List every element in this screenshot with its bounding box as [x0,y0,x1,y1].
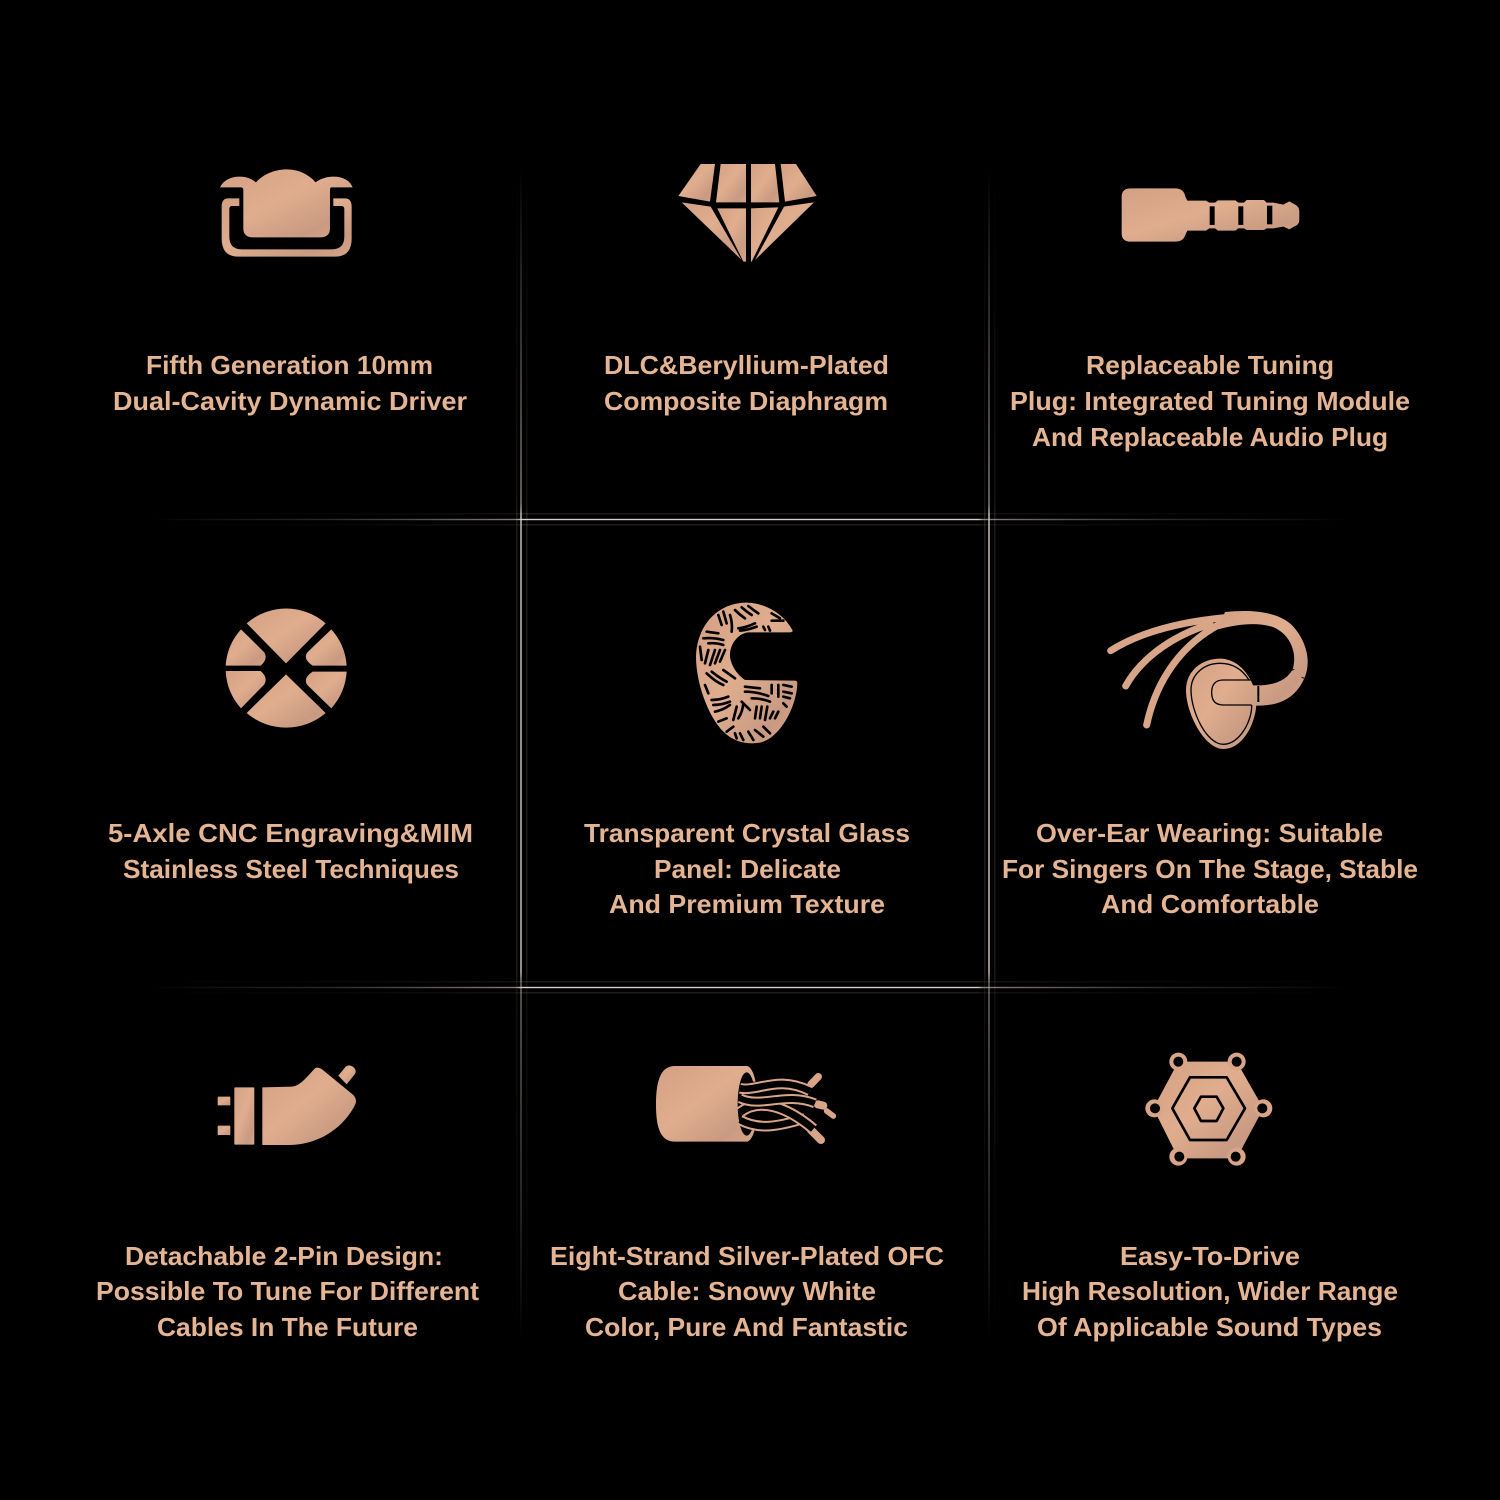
text: 2-pin caption: Cables In The Future [157,1312,418,1342]
panel: 2-pin design [96,1065,479,1342]
text: diaphragm caption: Composite Diaphragm [604,386,888,416]
panel: diaphragm [604,164,889,416]
icon: in-ear monitor with ear hook [1111,611,1308,749]
text: CNC caption [108,818,473,884]
grid dividers [150,170,1350,1340]
text: 2-pin caption: Possible To Tune For Different [96,1276,479,1306]
text: easy to drive caption: Of Applicable Sound Types [1037,1312,1382,1342]
text: cable caption: Cable: Snowy White [618,1276,876,1306]
icon: cross circle [226,608,347,728]
text: 2-pin caption [96,1241,479,1342]
text: driver caption: Dual-Cavity Dynamic Driver [113,386,467,416]
panel: easy to drive [1022,1053,1398,1342]
panel: CNC engraving [108,608,473,884]
text: over-ear caption: Over-Ear Wearing: Suitable [1036,818,1383,848]
text: tuning plug caption: Plug: Integrated Tuning Module [1010,386,1410,416]
text: diaphragm caption: DLC&Beryllium-Plated [604,350,889,380]
text: diaphragm caption [604,350,889,416]
icon: hexagon plate [1145,1053,1272,1166]
text: CNC caption: 5-Axle CNC Engraving&MIM [108,818,473,848]
text: driver caption [113,350,467,416]
text: cable caption: Color, Pure And Fantastic [585,1312,908,1342]
text: tuning plug caption: Replaceable Tuning [1086,350,1334,380]
text: CNC caption: Stainless Steel Techniques [123,854,459,884]
text: crystal glass caption: And Premium Texture [609,889,885,919]
text: easy to drive caption: High Resolution, Wider Range [1022,1276,1398,1306]
text: over-ear caption: For Singers On The Stage, Stable [1002,854,1418,884]
icon: patterned faceplate [696,603,797,743]
icon: driver [220,169,353,257]
text: crystal glass caption [584,818,910,919]
panel: crystal glass [584,603,910,919]
text: cable caption [550,1241,944,1342]
text: crystal glass caption: Transparent Crystal Glass [584,818,910,848]
text: over-ear caption: And Comfortable [1101,889,1319,919]
text: tuning plug caption: And Replaceable Audio Plug [1032,422,1388,452]
icon: audio plug [1122,188,1299,242]
text: tuning plug caption [1010,350,1410,452]
panel: over-ear wearing [1002,611,1418,919]
icon: 2-pin connector [218,1065,356,1145]
icon: diamond [678,164,817,262]
panel: tuning plug [1010,188,1410,452]
text: over-ear caption [1002,818,1418,919]
text: crystal glass caption: Panel: Delicate [654,854,841,884]
text: driver caption: Fifth Generation 10mm [146,350,433,380]
text: easy to drive caption [1022,1241,1398,1342]
panel: silver-plated cable [550,1066,944,1342]
icon: stranded cable [656,1066,833,1142]
text: cable caption: Eight-Strand Silver-Plated OFC [550,1241,944,1271]
text: easy to drive caption: Easy-To-Drive [1120,1241,1300,1271]
text: 2-pin caption: Detachable 2-Pin Design: [125,1241,443,1271]
panel: dynamic driver [113,169,467,416]
